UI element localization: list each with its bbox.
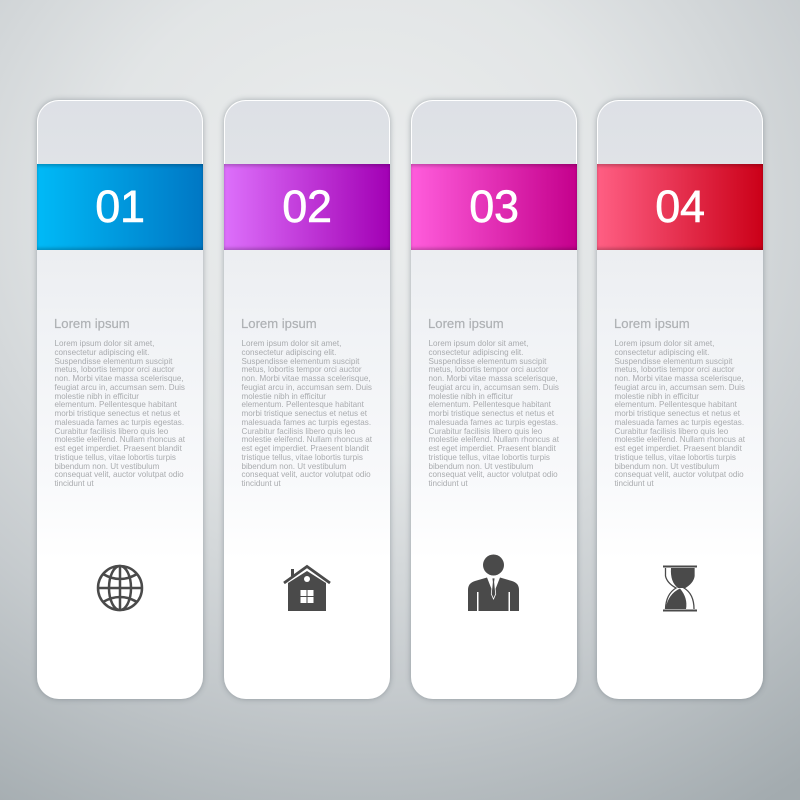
body text 4: non. Morbi vitae massa scelerisque,: [614, 374, 744, 383]
body text 2: morbi tristique senectus et netus et: [242, 409, 367, 418]
body text 4: molestie nibh in efficitur: [614, 392, 699, 400]
icon: house: [283, 564, 331, 611]
body text 4: consectetur adipiscing elit.: [614, 348, 709, 357]
body text 2: Curabitur facilisis libero quis leo: [242, 426, 355, 436]
body text 2: elementum. Pellentesque habitant: [242, 400, 364, 409]
body text 1: consequat velit, auctor volutpat odio: [54, 470, 184, 479]
body text 3: consequat velit, auctor volutpat odio: [428, 470, 558, 479]
body text 2: non. Morbi vitae massa scelerisque,: [242, 374, 371, 383]
body text 1: morbi tristique senectus et netus et: [54, 409, 180, 418]
body text 1: tincidunt ut: [54, 479, 94, 488]
body text 4: Lorem ipsum dolor sit amet,: [614, 339, 714, 348]
body text 2: Lorem ipsum dolor sit amet,: [242, 339, 341, 348]
body text 4: tincidunt ut: [614, 479, 654, 488]
body text 4: feugiat arcu in, accumsan sem. Duis: [614, 383, 745, 392]
heading 4: Lorem ipsum: [614, 316, 690, 331]
body text 2: malesuada fames ac turpis egestas.: [242, 418, 371, 427]
number band 01: 01: [95, 181, 145, 232]
body text 3: non. Morbi vitae massa scelerisque,: [428, 374, 558, 383]
icon: hourglass: [663, 566, 697, 612]
number band 02: [224, 164, 390, 250]
heading 2: Lorem ipsum: [241, 316, 317, 331]
body text 4: consequat velit, auctor volutpat odio: [614, 470, 744, 479]
body text 1: Curabitur facilisis libero quis leo: [54, 426, 168, 436]
number band 03: [411, 164, 577, 250]
card 2: [224, 100, 390, 699]
number band 04: [597, 164, 763, 250]
body text 4: Curabitur facilisis libero quis leo: [614, 426, 728, 436]
body text 1: bibendum non. Ut vestibulum: [54, 462, 159, 470]
body text 3: Suspendisse elementum suscipit: [428, 356, 546, 366]
icon: globe: [96, 564, 144, 612]
body text 2: consectetur adipiscing elit.: [242, 348, 336, 357]
body text 3: elementum. Pellentesque habitant: [428, 400, 551, 409]
body text 1: consectetur adipiscing elit.: [54, 348, 149, 357]
body text 2: molestie eleifend. Nullam rhoncus at: [242, 435, 372, 444]
body text 4: bibendum non. Ut vestibulum: [614, 462, 719, 470]
body text 2: tincidunt ut: [242, 479, 281, 488]
card 4 top tab: [597, 100, 763, 164]
body text 2: tristique tellus, vitae lobortis turpis: [242, 453, 363, 462]
body text 3: molestie eleifend. Nullam rhoncus at: [428, 435, 559, 444]
body text 1: tristique tellus, vitae lobortis turpis: [54, 453, 176, 462]
body text 2: Suspendisse elementum suscipit: [242, 356, 359, 366]
body text 2: est eget imperdiet. Praesent blandit: [242, 444, 369, 453]
body text 1: est eget imperdiet. Praesent blandit: [54, 444, 182, 453]
number band 02: 02: [282, 181, 332, 232]
card 4: [597, 100, 763, 699]
body text 3: [428, 339, 559, 488]
body text 3: tristique tellus, vitae lobortis turpis: [428, 453, 550, 462]
card 3: [411, 100, 577, 699]
card 1: [37, 100, 203, 699]
body text 1: molestie nibh in efficitur: [54, 392, 139, 400]
body text 2: [242, 339, 372, 488]
body text 4: tristique tellus, vitae lobortis turpis: [614, 453, 736, 462]
card 1 top tab: [37, 100, 203, 164]
number band 03: 03: [469, 181, 519, 232]
body text 4: [614, 339, 745, 488]
card 3 top tab: [411, 100, 577, 164]
body text 3: malesuada fames ac turpis egestas.: [428, 418, 558, 427]
body text 1: Suspendisse elementum suscipit: [54, 356, 172, 366]
number band 04: 04: [655, 181, 705, 232]
body text 3: molestie nibh in efficitur: [428, 392, 513, 400]
body text 3: metus, lobortis tempor orci auctor: [428, 365, 549, 374]
body text 2: molestie nibh in efficitur: [242, 392, 326, 400]
body text 4: Suspendisse elementum suscipit: [614, 356, 732, 366]
icon: businessman: [468, 554, 519, 611]
body text 3: Lorem ipsum dolor sit amet,: [428, 339, 528, 348]
body text 4: elementum. Pellentesque habitant: [614, 400, 737, 409]
body text 3: Curabitur facilisis libero quis leo: [428, 426, 542, 436]
body text 3: consectetur adipiscing elit.: [428, 348, 523, 357]
body text 3: feugiat arcu in, accumsan sem. Duis: [428, 383, 559, 392]
body text 1: metus, lobortis tempor orci auctor: [54, 365, 175, 374]
body text 4: morbi tristique senectus et netus et: [614, 409, 740, 418]
body text 1: [54, 339, 185, 488]
body text 1: malesuada fames ac turpis egestas.: [54, 418, 184, 427]
heading 1: Lorem ipsum: [54, 316, 130, 331]
body text 4: metus, lobortis tempor orci auctor: [614, 365, 735, 374]
body text 2: metus, lobortis tempor orci auctor: [242, 365, 362, 374]
body text 2: feugiat arcu in, accumsan sem. Duis: [242, 383, 372, 392]
body text 1: feugiat arcu in, accumsan sem. Duis: [54, 383, 185, 392]
body text 1: elementum. Pellentesque habitant: [54, 400, 177, 409]
body text 4: est eget imperdiet. Praesent blandit: [614, 444, 742, 453]
body text 3: morbi tristique senectus et netus et: [428, 409, 554, 418]
body text 3: tincidunt ut: [428, 479, 468, 488]
body text 2: bibendum non. Ut vestibulum: [242, 462, 346, 470]
body text 3: est eget imperdiet. Praesent blandit: [428, 444, 556, 453]
body text 1: Lorem ipsum dolor sit amet,: [54, 339, 154, 348]
body text 2: consequat velit, auctor volutpat odio: [242, 470, 371, 479]
body text 1: molestie eleifend. Nullam rhoncus at: [54, 435, 185, 444]
heading 3: Lorem ipsum: [428, 316, 504, 331]
body text 4: molestie eleifend. Nullam rhoncus at: [614, 435, 745, 444]
body text 3: bibendum non. Ut vestibulum: [428, 462, 533, 470]
card 2 top tab: [224, 100, 390, 164]
body text 1: non. Morbi vitae massa scelerisque,: [54, 374, 184, 383]
body text 4: malesuada fames ac turpis egestas.: [614, 418, 744, 427]
number band 01: [37, 164, 203, 250]
